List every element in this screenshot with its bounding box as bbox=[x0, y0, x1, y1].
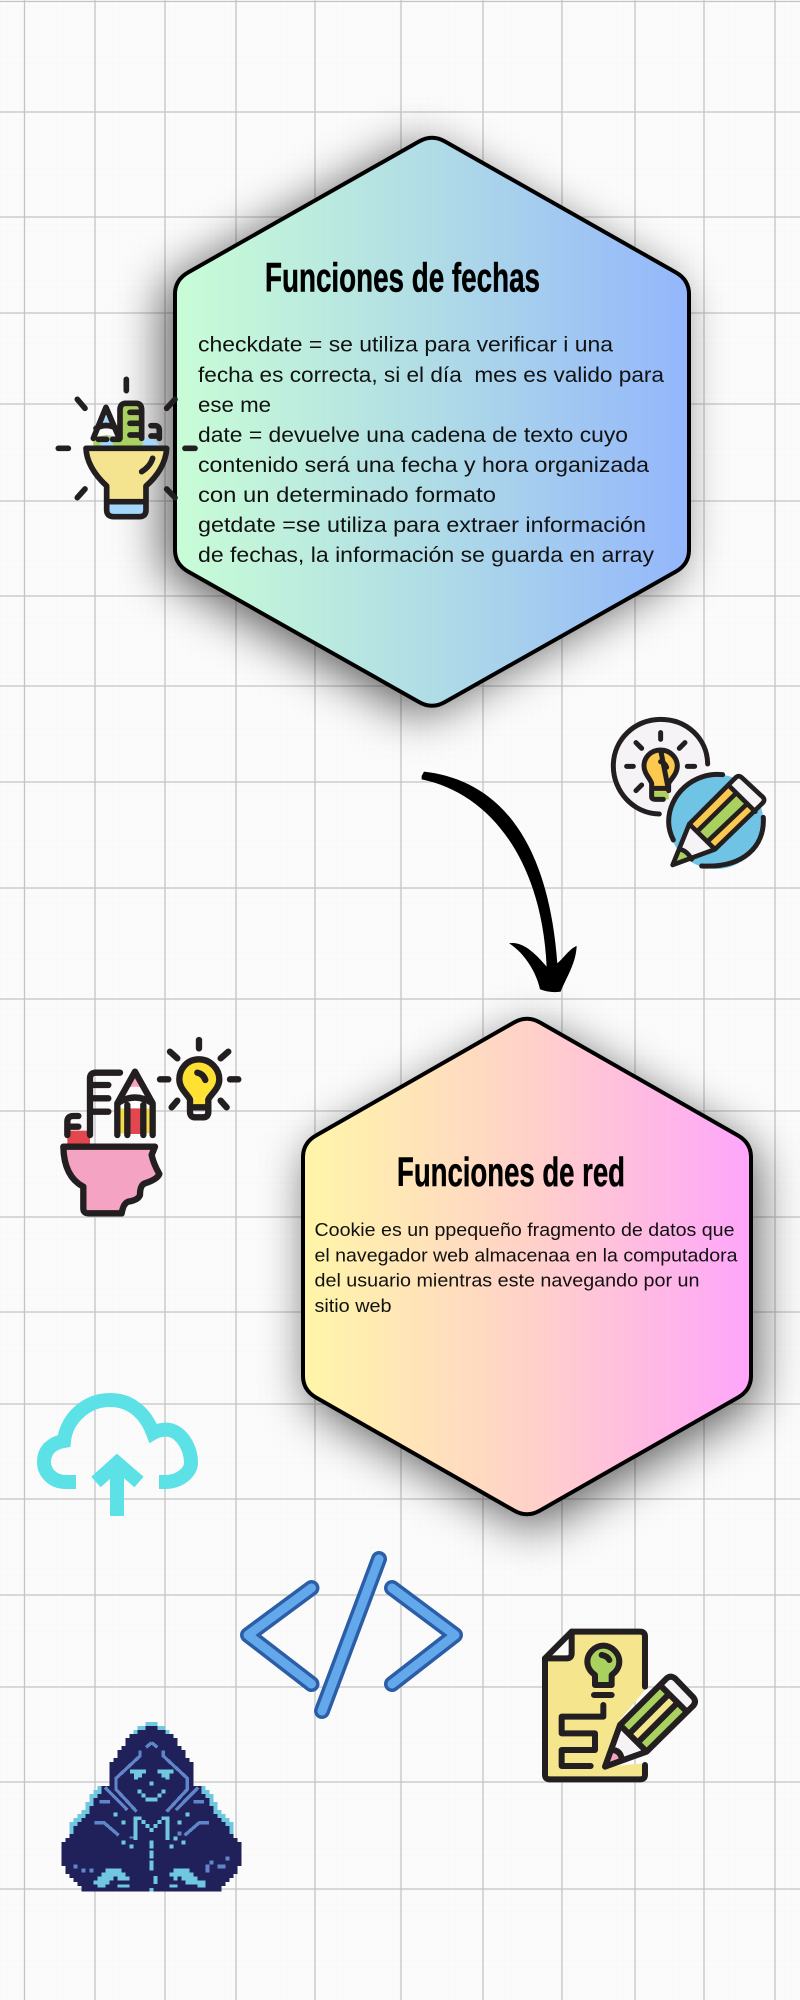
heading: funciones de red: Funciones de red bbox=[397, 1149, 625, 1195]
text block: date functions: checkdate = se utiliza para verificar i una bbox=[198, 332, 613, 356]
text block: date functions: con un determinado formato bbox=[198, 483, 496, 507]
icon: code brackets bbox=[248, 1559, 455, 1711]
icon: lightbulb and pencil in circles bbox=[613, 719, 765, 869]
text block: date functions bbox=[198, 332, 664, 567]
text block: date functions: getdate =se utiliza para extraer información bbox=[198, 513, 646, 537]
text block: cookie definition: el navegador web almacenaa en la computadora bbox=[314, 1244, 738, 1266]
text block: cookie definition: Cookie es un ppequeño fragmento de datos que bbox=[314, 1219, 734, 1240]
icon: head with pencil, ruler and lightbulb bbox=[63, 1040, 238, 1213]
heading: funciones de fechas: Funciones de fechas bbox=[265, 254, 540, 300]
arrow: curved black arrow bbox=[422, 772, 577, 992]
text block: date functions: ese me bbox=[198, 393, 271, 417]
icon: pixel art hacker bbox=[62, 1722, 242, 1892]
text block: cookie definition bbox=[314, 1219, 738, 1316]
panel: funciones de red bbox=[303, 1019, 757, 1526]
text block: date functions: de fechas, la información se guarda en array bbox=[198, 543, 654, 567]
text block: cookie definition: sitio web bbox=[314, 1295, 392, 1316]
text block: date functions: contenido será una fecha y hora organizada bbox=[198, 453, 649, 477]
panel: funciones de fechas bbox=[163, 138, 689, 714]
icon: lightbulb with pencil and ruler bbox=[58, 379, 195, 517]
text block: date functions: fecha es correcta, si el día mes es valido para bbox=[198, 363, 664, 387]
icon: cloud upload bbox=[44, 1400, 191, 1516]
icon: document with lightbulb and pencil bbox=[545, 1632, 696, 1779]
text block: cookie definition: del usuario mientras este navegando por un bbox=[314, 1270, 700, 1290]
text block: date functions: date = devuelve una cadena de texto cuyo bbox=[198, 423, 628, 447]
